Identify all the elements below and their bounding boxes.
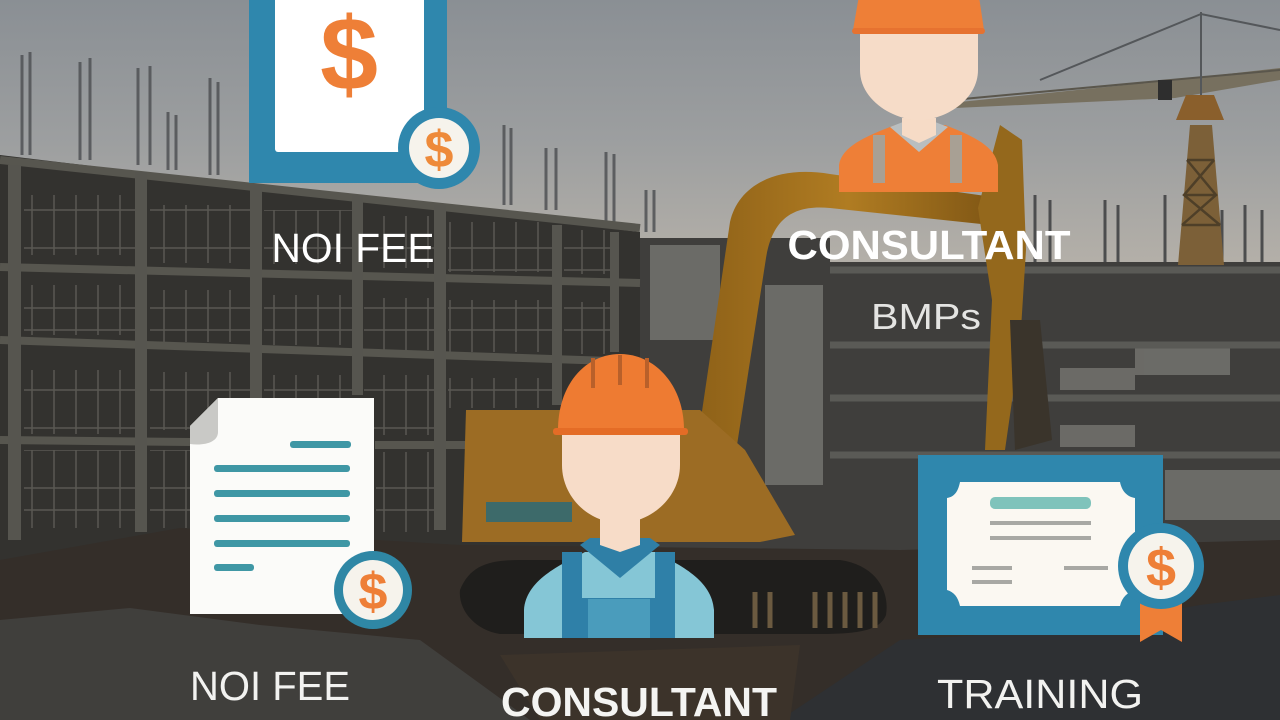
icon: certificate with rosette: $	[1146, 538, 1176, 598]
icon: consultant with orange helmet	[839, 0, 998, 192]
main building left	[0, 155, 640, 560]
label: NOI FEE bottom: NOI FEE	[190, 663, 350, 709]
card: consultant bottom	[501, 354, 777, 720]
card: consultant top	[788, 0, 1070, 268]
icon: dollar document on blue frame: $	[425, 121, 454, 179]
building window openings	[24, 195, 610, 532]
label: NOI FEE top: NOI FEE	[272, 225, 434, 271]
distant building right	[640, 238, 1280, 570]
tower crane	[950, 12, 1280, 265]
columns	[8, 165, 619, 540]
icon: document with dollar badge	[190, 398, 412, 629]
ground	[0, 528, 1280, 720]
card: NOI fee top	[249, 0, 480, 271]
icon: worker in overalls and orange helmet	[524, 354, 714, 638]
floor slabs	[0, 160, 640, 445]
card: training	[918, 455, 1204, 717]
label: TRAINING: TRAINING	[937, 671, 1143, 717]
rebar columns on roof	[22, 52, 654, 232]
icon: document with dollar badge: $	[359, 563, 388, 621]
excavator tracks	[460, 560, 887, 634]
icon: dollar document on blue frame	[249, 0, 480, 189]
icon: certificate with rosette	[918, 455, 1204, 642]
excavator	[462, 125, 1052, 542]
icon: dollar document on blue frame: $	[320, 0, 378, 113]
card: NOI fee bottom	[190, 398, 412, 709]
label: CONSULTANT top: CONSULTANT	[788, 222, 1070, 268]
label: BMPs: BMPs	[871, 296, 981, 337]
